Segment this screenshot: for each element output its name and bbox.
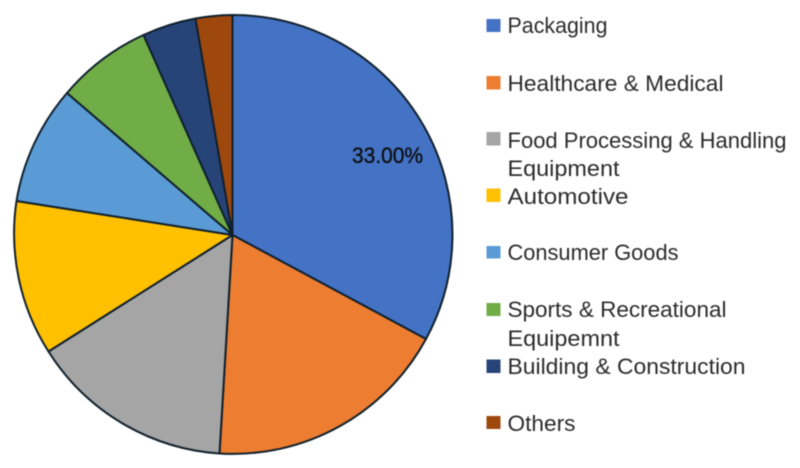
legend item: Food Processing & Handling Equipment: Food Processing & Handling: [508, 128, 786, 153]
legend item: Building & Construction: Building & Construction: [508, 354, 746, 379]
legend item: Consumer Goods: Consumer Goods: [508, 240, 678, 265]
legend item: Food Processing & Handling Equipment: [486, 128, 786, 181]
legend item: Automotive: Automotive: [508, 184, 628, 209]
slice: Food Processing & Handling Equipment: [48, 235, 232, 454]
slice: Consumer Goods: [16, 93, 232, 235]
legend item: Sports & Recreational Equipemnt: [486, 297, 726, 351]
slice: Automotive: [14, 201, 232, 352]
legend item: Sports & Recreational Equipemnt: Equipemnt: [508, 326, 620, 351]
slice: Building & Construction: [144, 18, 232, 235]
pie chart: [14, 15, 452, 454]
slice: Sports & Recreational Equipemnt: [67, 35, 232, 235]
legend item: Sports & Recreational Equipemnt: Sports & Recreational: [508, 297, 726, 322]
legend item: Others: Others: [508, 411, 576, 436]
legend item: Healthcare & Medical: Healthcare & Medical: [508, 71, 724, 96]
legend item: Food Processing & Handling Equipment: Equipment: [508, 156, 620, 181]
legend: [486, 13, 786, 436]
slice: Healthcare & Medical: [220, 235, 426, 454]
legend item: Packaging: Packaging: [508, 13, 608, 38]
slice: Packaging: [232, 15, 452, 339]
data label: 33.00%: 33.00%: [352, 143, 423, 168]
slice: Others: [196, 15, 232, 235]
